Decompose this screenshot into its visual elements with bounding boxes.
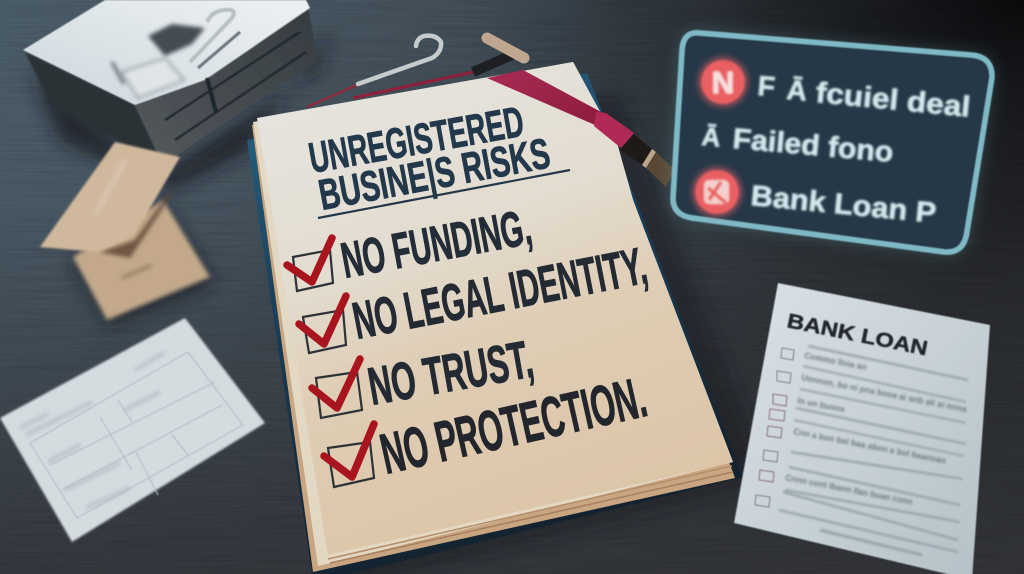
clipboard cover (247, 73, 743, 574)
icon: padlock and clip on box (112, 24, 205, 98)
checklist item 1: NO FUNDING, (337, 199, 536, 289)
tan envelopes (40, 142, 215, 326)
heading: unregistered business risks (305, 98, 554, 220)
checklist item 4 (324, 365, 652, 487)
registration form card, left (0, 318, 265, 542)
form checkboxes (755, 348, 794, 507)
checklist item 3: NO TRUST, (364, 330, 538, 417)
panel text lines: Ā (700, 121, 722, 153)
icon: red badge N: N (712, 65, 734, 100)
panel text lines: Ā (785, 74, 808, 107)
panel text lines: Bank Loan P (749, 180, 938, 230)
pen body (620, 134, 652, 165)
icon: red badge N (697, 56, 749, 108)
checklist item 4: NO PROTECTION. (375, 365, 652, 487)
heading: unregistered business risks: UNREGISTERED (305, 98, 527, 183)
panel text lines: F (756, 70, 776, 102)
form small text (785, 350, 968, 507)
bank loan heading: BANK LOAN (785, 309, 930, 360)
neon status panel (673, 33, 992, 252)
heading underline (318, 170, 570, 218)
icon: red badge Q (691, 166, 743, 218)
form small text: In un buoos (797, 395, 846, 414)
panel text lines: fcuiel deal (814, 77, 972, 124)
paper stack edges (252, 62, 735, 572)
top sheet (257, 62, 733, 555)
form small text: Uonnon, bo ni pna booa ai anb ali ai onna (801, 372, 968, 414)
ribbon and pen (487, 70, 675, 187)
clipboard with checklist (247, 62, 770, 574)
form small text: Cnnn cont lbann llan buan conn (785, 472, 914, 507)
form small text: Cnn a bon bel baa abon e bol baanoan (793, 426, 947, 466)
bank loan form sheet (734, 283, 990, 574)
hook and cord above clipboard (307, 36, 524, 107)
panel text lines (700, 70, 972, 230)
checklist item 2 (299, 237, 652, 353)
white box with padlock (23, 0, 330, 190)
panel text lines: Failed fono (731, 123, 895, 169)
form small text: Commo lloia an (804, 350, 868, 372)
checklist item 2: NO LEGAL IDENTITY, (348, 237, 652, 351)
checklist item 3 (312, 330, 538, 418)
form text lines (779, 346, 968, 555)
heading: unregistered business risks: BUSINE|S RISKS (315, 130, 554, 220)
checklist item 1 (287, 199, 536, 291)
